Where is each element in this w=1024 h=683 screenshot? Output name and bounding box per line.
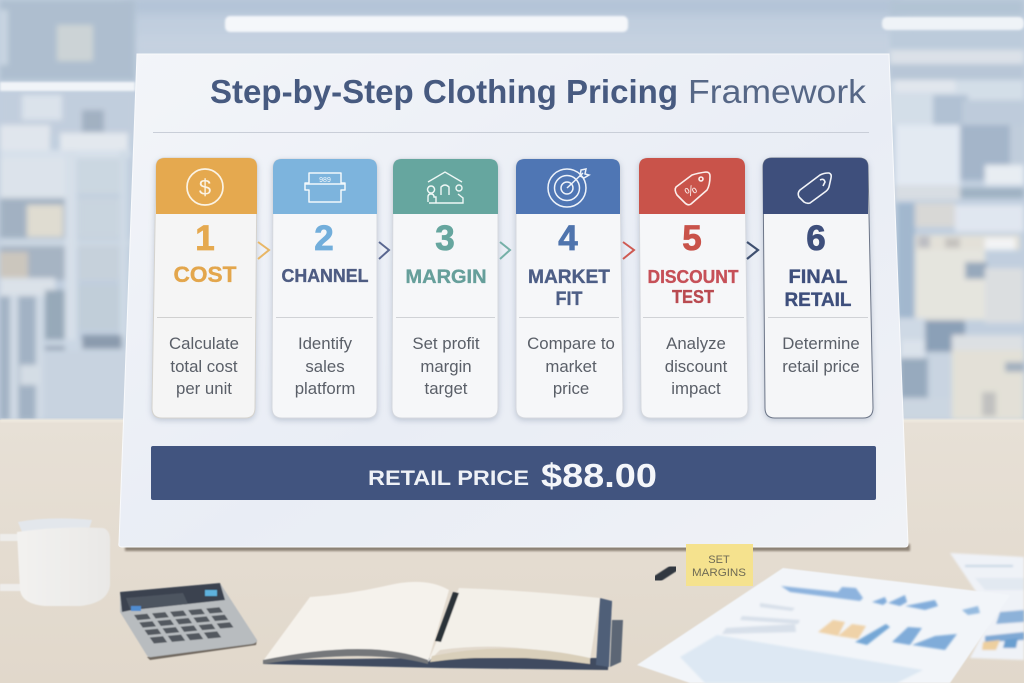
step description: price (553, 379, 589, 398)
arrow 2 to 3 (379, 242, 389, 259)
card 4: market fit (516, 159, 623, 418)
step description: Set profit (412, 334, 480, 353)
icon: price tag (798, 173, 831, 203)
step number 6: 6 (806, 219, 826, 258)
open notebook (263, 582, 623, 670)
step description: retail price (782, 357, 860, 376)
card 6: final retail (763, 158, 873, 418)
step number 2: 2 (314, 219, 334, 258)
step number 3: 3 (435, 219, 455, 258)
left shelves (0, 0, 135, 80)
calculator (120, 583, 257, 660)
step label: CHANNEL (282, 266, 369, 286)
step description: Determine (782, 334, 860, 353)
step label: RETAIL (784, 289, 852, 311)
front report with bar charts (637, 568, 1010, 683)
icon: register (305, 173, 345, 202)
step number 5: 5 (682, 219, 702, 258)
calculator keys (134, 607, 239, 644)
step label: DISCOUNT (648, 267, 739, 287)
coffee mug (0, 518, 110, 606)
pen (435, 592, 459, 642)
icon: storefront (428, 172, 463, 203)
step description: sales (305, 357, 345, 376)
sticky note: SET (708, 554, 730, 566)
step description: Identify (298, 334, 353, 353)
panel: presentation board (119, 54, 908, 547)
sticky note (686, 544, 753, 586)
retail price banner: $88.00 (541, 457, 657, 494)
back report sheet (950, 553, 1024, 660)
step label: COST (174, 262, 237, 287)
step number 4: 4 (558, 219, 578, 258)
icon: discount tag (675, 172, 710, 205)
icon: dollar coin: $ (199, 175, 211, 200)
step description: Calculate (169, 334, 239, 353)
step label: MARGIN (406, 266, 486, 288)
background: blurred warehouse (0, 0, 1024, 425)
report text lines (722, 603, 800, 634)
retail price banner (151, 446, 876, 500)
step description: impact (671, 379, 721, 398)
step description: margin (420, 357, 472, 376)
pen clip (657, 568, 674, 579)
title: Step-by-Step Clothing Pricing (210, 73, 678, 110)
step label: TEST (672, 287, 714, 307)
retail price banner: RETAIL PRICE (368, 467, 529, 490)
title: Framework (688, 73, 867, 110)
board shadow (125, 544, 910, 551)
step label: FINAL (788, 266, 848, 288)
step description: market (545, 357, 597, 376)
step description: target (425, 379, 468, 398)
step description: Compare to (527, 334, 615, 353)
card 1: cost (152, 158, 257, 418)
card 2: channel (272, 159, 377, 418)
chart: lower bars (818, 620, 866, 639)
step label: FIT (556, 288, 583, 310)
step label: MARKET (528, 266, 610, 288)
step description: per unit (176, 379, 232, 398)
sticky note: MARGINS (692, 567, 746, 579)
icon: register: 989 (319, 177, 331, 184)
step number 1: 1 (195, 219, 215, 258)
step description: Analyze (666, 334, 726, 353)
card 3: margin (392, 159, 498, 418)
arrow 1 to 2 (258, 242, 269, 259)
arrow 5 to 6 (747, 242, 758, 259)
arrow 4 to 5 (623, 242, 634, 259)
step description: discount (665, 357, 728, 376)
report table (680, 635, 923, 683)
card 5: discount test (639, 158, 748, 418)
step description: platform (295, 379, 355, 398)
icon: discount tag: % (682, 181, 700, 200)
arrow 3 to 4 (500, 242, 510, 259)
icon: dollar coin (187, 169, 223, 205)
desk surface (0, 419, 1024, 683)
step description: total cost (170, 357, 238, 376)
chart: top bars (781, 586, 863, 601)
icon: target (548, 169, 589, 207)
right shelves (890, 0, 1024, 15)
